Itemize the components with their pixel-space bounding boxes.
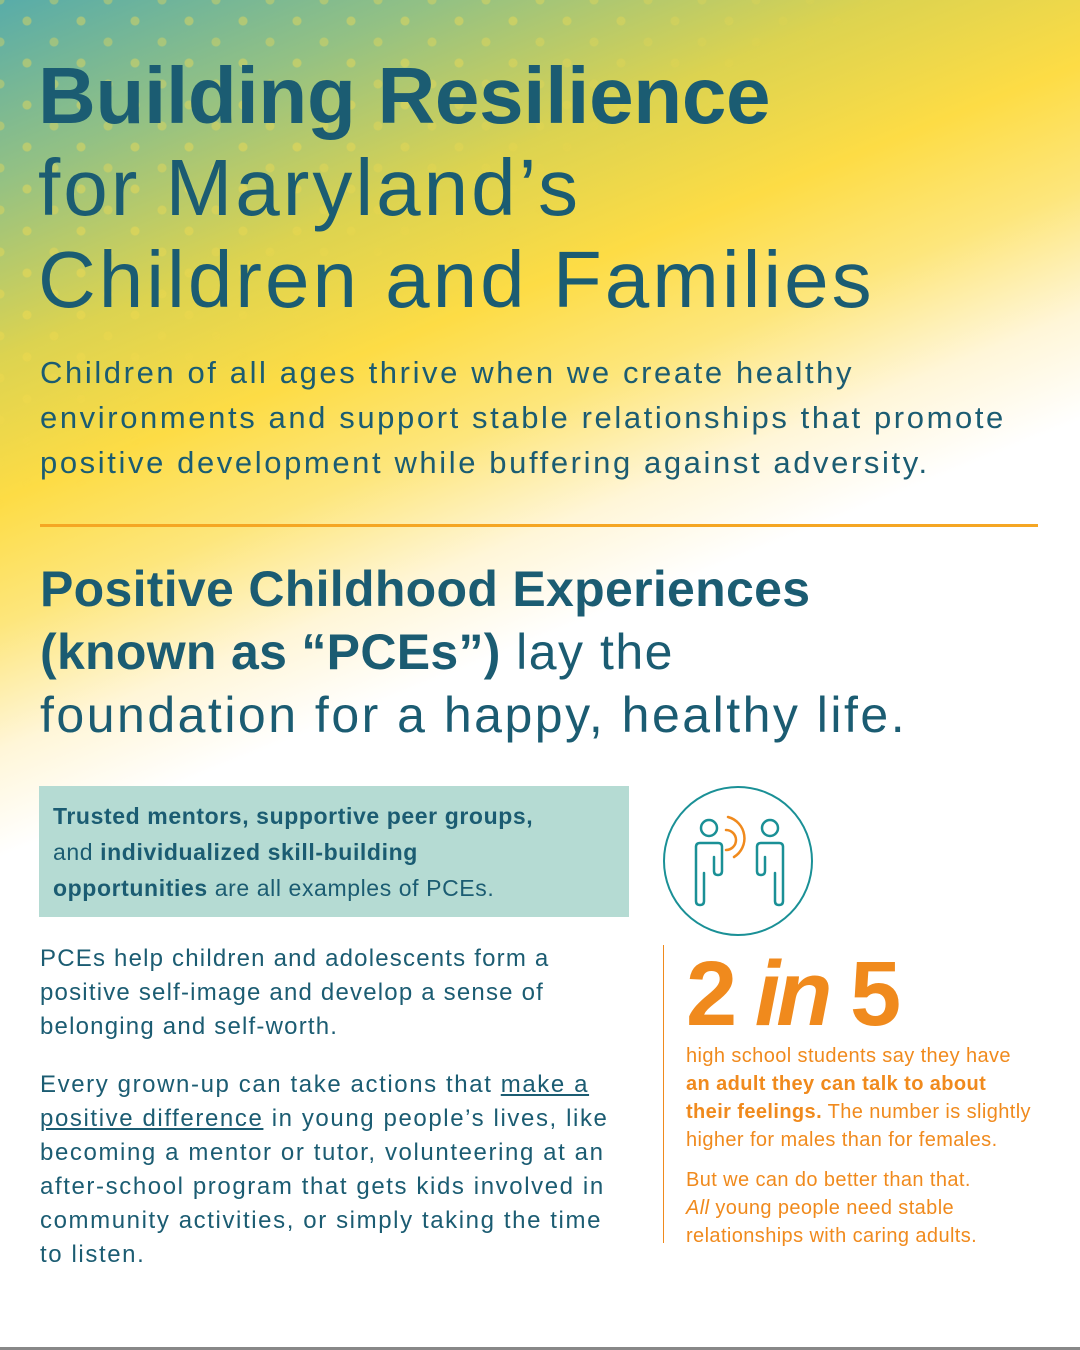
subtitle: Children of all ages thrive when we create healthy xyxy=(40,355,854,390)
callout box xyxy=(39,786,629,917)
paragraph 2: after-school program that gets kids involved in xyxy=(40,1173,605,1200)
callout box: Trusted mentors, supportive peer groups, xyxy=(53,803,533,829)
stat text xyxy=(685,1045,1031,1247)
callout box: and individualized skill-building xyxy=(53,839,418,865)
callout box: opportunities are all examples of PCEs. xyxy=(53,875,494,901)
stat text: higher for males than for females. xyxy=(686,1129,998,1151)
paragraph 2: community activities, or simply taking the time xyxy=(40,1207,602,1234)
title xyxy=(38,51,875,324)
paragraph 1: PCEs help children and adolescents form a xyxy=(40,945,549,972)
paragraph 1: belonging and self-worth. xyxy=(40,1013,338,1040)
title: Building Resilience xyxy=(38,51,770,140)
stat text: their feelings. The number is slightly xyxy=(686,1101,1031,1123)
paragraph 2: positive difference in young people’s lives, like xyxy=(40,1105,608,1132)
statistic: 2 in 5 xyxy=(686,943,897,1045)
stat text: All young people need stable xyxy=(686,1197,954,1219)
title: Children and Families xyxy=(38,235,875,324)
paragraph 2: to listen. xyxy=(40,1241,145,1268)
paragraph 1: positive self-image and develop a sense of xyxy=(40,979,544,1006)
paragraph 2: becoming a mentor or tutor, volunteering at an xyxy=(40,1139,605,1166)
subtitle: positive development while buffering against adversity. xyxy=(40,445,930,480)
paragraph 2 xyxy=(40,1071,608,1268)
section heading xyxy=(40,561,907,743)
subtitle xyxy=(40,355,1006,480)
stat text: high school students say they have xyxy=(686,1045,1011,1067)
section heading: (known as “PCEs”) lay the xyxy=(40,624,674,680)
icon: two people talking xyxy=(663,786,813,936)
subtitle: environments and support stable relationships that promote xyxy=(40,400,1006,435)
paragraph 1 xyxy=(40,945,549,1040)
paragraph 2: Every grown-up can take actions that make a xyxy=(40,1071,589,1098)
stat text: relationships with caring adults. xyxy=(686,1225,977,1247)
title: for Maryland’s xyxy=(38,143,581,232)
stat text: an adult they can talk to about xyxy=(686,1073,986,1095)
stat text: But we can do better than that. xyxy=(686,1169,971,1191)
section heading: Positive Childhood Experiences xyxy=(40,561,810,617)
section heading: foundation for a happy, healthy life. xyxy=(40,687,907,743)
